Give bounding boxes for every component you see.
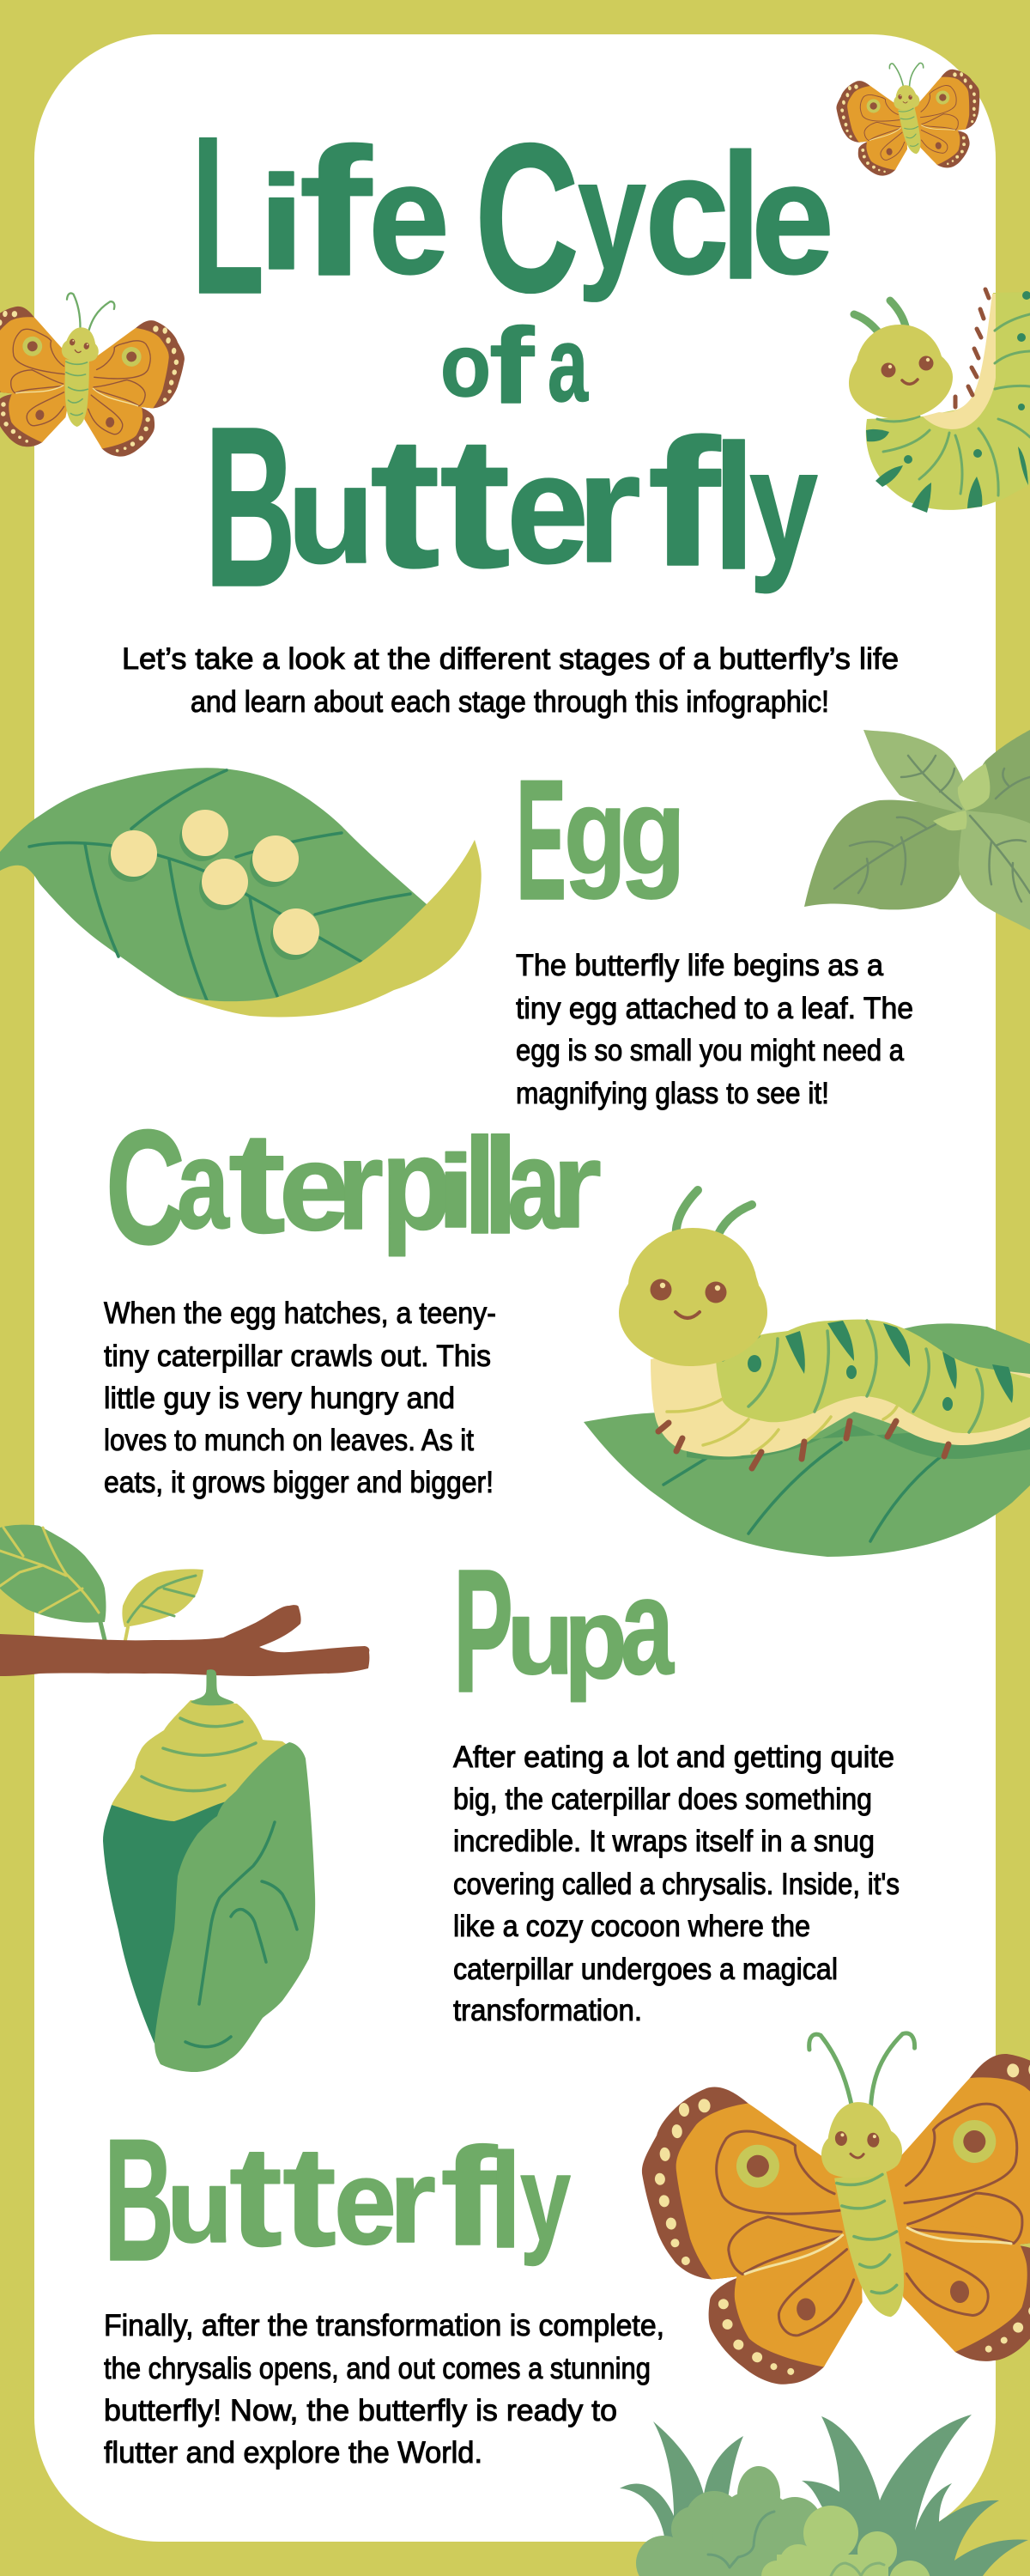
title: r <box>576 420 641 595</box>
text: pupa description: like a cozy cocoon where the <box>453 1910 810 1943</box>
title: f <box>299 110 373 313</box>
title: e <box>506 421 589 596</box>
heading: Caterpillar: l <box>482 1109 518 1262</box>
heading: Butterfly: e <box>334 2134 397 2269</box>
icon: branch with leaves <box>0 1525 369 1676</box>
text: caterpillar description: loves to munch on leaves. As it <box>104 1424 474 1457</box>
icon: leaves top right of egg section <box>804 730 1030 930</box>
text: pupa description: caterpillar undergoes a magical <box>453 1953 838 1986</box>
title: B <box>204 380 296 635</box>
heading: Egg: E <box>516 744 566 936</box>
title: l <box>712 408 755 606</box>
heading: Butterfly: f <box>440 2119 498 2275</box>
text: caterpillar description: tiny caterpillar crawls out. This <box>104 1340 491 1373</box>
icon: grass and bushes <box>620 2415 1028 2576</box>
icon: large butterfly <box>628 2005 1030 2397</box>
heading: Caterpillar: r <box>336 1115 384 1256</box>
title: l <box>720 118 761 317</box>
heading: Caterpillar: e <box>279 1118 349 1256</box>
text: caterpillar description <box>104 1297 496 1499</box>
title: i <box>258 149 306 298</box>
title: c <box>645 118 730 310</box>
text: pupa description: big, the caterpillar does something <box>453 1783 872 1816</box>
text: pupa description: incredible. It wraps itself in a snug <box>453 1825 875 1858</box>
heading: Caterpillar: C <box>106 1097 185 1279</box>
heading: Butterfly: t <box>282 2117 336 2276</box>
title: t <box>439 398 511 606</box>
icon: caterpillar on leaf <box>584 1190 1030 1557</box>
title: L <box>191 89 264 341</box>
title: f <box>489 307 534 426</box>
title: e <box>368 130 450 307</box>
title <box>191 89 834 635</box>
title: o <box>440 316 491 415</box>
heading: Butterfly: u <box>167 2148 233 2264</box>
heading: Caterpillar: p <box>381 1110 451 1257</box>
heading: Pupa: a <box>621 1549 675 1703</box>
heading: Pupa: u <box>506 1578 574 1697</box>
heading: Butterfly: B <box>104 2103 174 2298</box>
heading: Egg: g <box>620 763 686 900</box>
heading: Caterpillar: l <box>464 1109 496 1262</box>
heading: Caterpillar: a <box>177 1114 230 1255</box>
text: butterfly description <box>104 2309 664 2470</box>
title: C <box>475 100 579 337</box>
heading: Egg: g <box>564 763 627 900</box>
text: butterfly description: flutter and explore the World. <box>104 2436 482 2470</box>
heading: Caterpillar: r <box>552 1117 602 1254</box>
text: egg description: egg is so small you might need a <box>516 1034 904 1067</box>
text: pupa description: After eating a lot and getting quite <box>453 1741 894 1774</box>
heading: Pupa: P <box>453 1533 513 1729</box>
text: butterfly description: butterfly! Now, the butterfly is ready to <box>104 2394 617 2427</box>
text: egg description: magnifying glass to see it! <box>516 1077 829 1110</box>
intro text <box>122 642 899 719</box>
heading: Butterfly: l <box>489 2126 522 2276</box>
icon: chrysalis <box>103 1669 315 2072</box>
intro text: and learn about each stage through this infographic! <box>191 685 829 719</box>
text: pupa description: transformation. <box>453 1994 642 2027</box>
text: caterpillar description: little guy is very hungry and <box>104 1382 455 1415</box>
title: f <box>647 401 721 604</box>
heading: Caterpillar: i <box>436 1133 476 1249</box>
heading: Caterpillar: a <box>507 1114 561 1255</box>
icon: butterfly left <box>0 284 190 462</box>
text: butterfly description: Finally, after the transformation is complete, <box>104 2309 664 2342</box>
icon: caterpillar top right <box>849 289 1030 513</box>
heading: Butterfly: t <box>229 2117 282 2276</box>
title: y <box>578 125 646 302</box>
title: e <box>751 130 834 307</box>
text: pupa description: covering called a chrysalis. Inside, it's <box>453 1868 900 1901</box>
text: egg description: The butterfly life begins as a <box>516 949 884 982</box>
heading: Butterfly: r <box>389 2133 436 2268</box>
heading: Pupa: p <box>564 1575 627 1703</box>
text: pupa description <box>453 1741 900 2027</box>
text: caterpillar description: eats, it grows bigger and bigger! <box>104 1466 494 1499</box>
icon: egg leaf <box>0 768 482 1017</box>
text: egg description: tiny egg attached to a leaf. The <box>516 992 913 1025</box>
title: t <box>370 398 440 606</box>
text: egg description <box>516 949 913 1110</box>
text: butterfly description: the chrysalis opens, and out comes a stunning <box>104 2352 651 2385</box>
text: caterpillar description: When the egg hatches, a teeny- <box>104 1297 496 1330</box>
intro text: Let’s take a look at the different stages of a butterfly’s life <box>122 642 899 676</box>
title: u <box>287 435 375 592</box>
title: y <box>749 416 818 594</box>
title: a <box>548 306 589 424</box>
heading: Caterpillar: t <box>228 1103 286 1263</box>
heading: Butterfly: y <box>520 2130 571 2267</box>
icon: small butterfly top right <box>832 53 988 180</box>
